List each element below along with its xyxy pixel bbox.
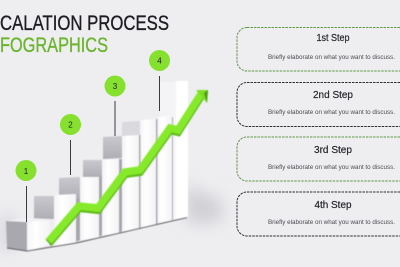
title line 1: CALATION PROCESS: [0, 12, 169, 35]
staircase bar chart: [6, 81, 188, 251]
step marker 2: 2: [68, 120, 73, 130]
growth arrow: [45, 90, 208, 246]
step marker 2: [60, 114, 81, 175]
step marker 4: 4: [157, 56, 162, 66]
card 1 heading: 1st Step: [316, 32, 350, 44]
card: 2nd step: [237, 82, 400, 126]
card 2 heading: 2nd Step: [313, 89, 353, 101]
step marker 1: 1: [24, 167, 29, 176]
step marker 3: 3: [113, 82, 118, 91]
step marker 4: [149, 50, 170, 111]
card 3 heading: 3rd Step: [314, 144, 352, 156]
step marker 3: [104, 76, 126, 136]
card: 4th step: [237, 192, 400, 236]
card 4 text: Briefly elaborate on what you want to discuss.: [268, 220, 395, 226]
floor shadow: [0, 185, 222, 250]
card 2 text: Briefly elaborate on what you want to discuss.: [268, 110, 395, 116]
title line 2: FOGRAPHICS: [0, 34, 108, 57]
card: 3rd step: [237, 137, 400, 181]
title: [0, 12, 169, 57]
card 3 text: Briefly elaborate on what you want to discuss.: [268, 165, 395, 171]
card: 1st step: [237, 28, 400, 71]
step marker 1: [16, 160, 36, 222]
card 1 text: Briefly elaborate on what you want to discuss.: [268, 55, 395, 61]
card 4 heading: 4th Step: [314, 199, 352, 211]
